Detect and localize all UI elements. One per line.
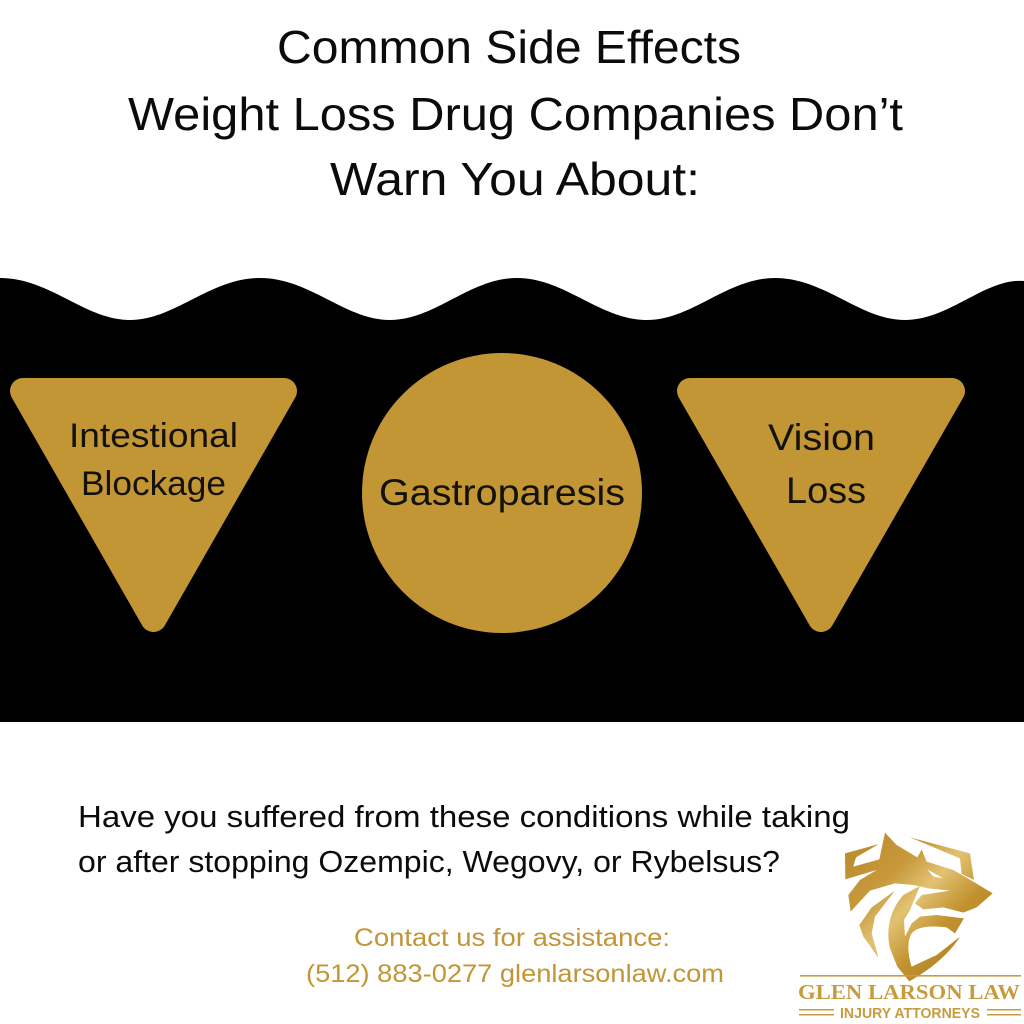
title: Weight Loss Drug Companies Don’t (128, 88, 903, 140)
logo rule (800, 975, 1021, 977)
logo name: GLEN LARSON LAW (798, 980, 1020, 1004)
question text: or after stopping Ozempic, Wegovy, or Rybelsus? (78, 844, 780, 879)
contact text: (512) 883-0277 glenlarsonlaw.com (306, 960, 724, 988)
panel: Gastroparesis circle (362, 353, 642, 633)
contact text: Contact us for assistance: (354, 924, 670, 952)
logo: Glen Larson Law (798, 833, 1021, 1022)
contact text (306, 924, 724, 988)
panel: Gastroparesis circle: Gastroparesis (379, 472, 625, 513)
panel: Vision Loss triangle: Loss (786, 470, 866, 511)
panel: black wavy band (0, 278, 1024, 722)
question text (78, 799, 850, 879)
icon: wolf head shield (845, 833, 993, 981)
title: Warn You About: (330, 153, 700, 205)
panel: Vision Loss triangle: Vision (768, 417, 875, 458)
panel: Intestional Blockage triangle: Intestional (69, 417, 238, 455)
panel: Intestional Blockage triangle (23, 391, 284, 619)
title: Common Side Effects (277, 21, 741, 73)
panel: Vision Loss triangle (690, 391, 952, 619)
panel: Intestional Blockage triangle: Blockage (81, 465, 226, 503)
question text: Have you suffered from these conditions while taking (78, 799, 850, 834)
logo tagline: INJURY ATTORNEYS (840, 1006, 980, 1022)
title (128, 21, 903, 205)
